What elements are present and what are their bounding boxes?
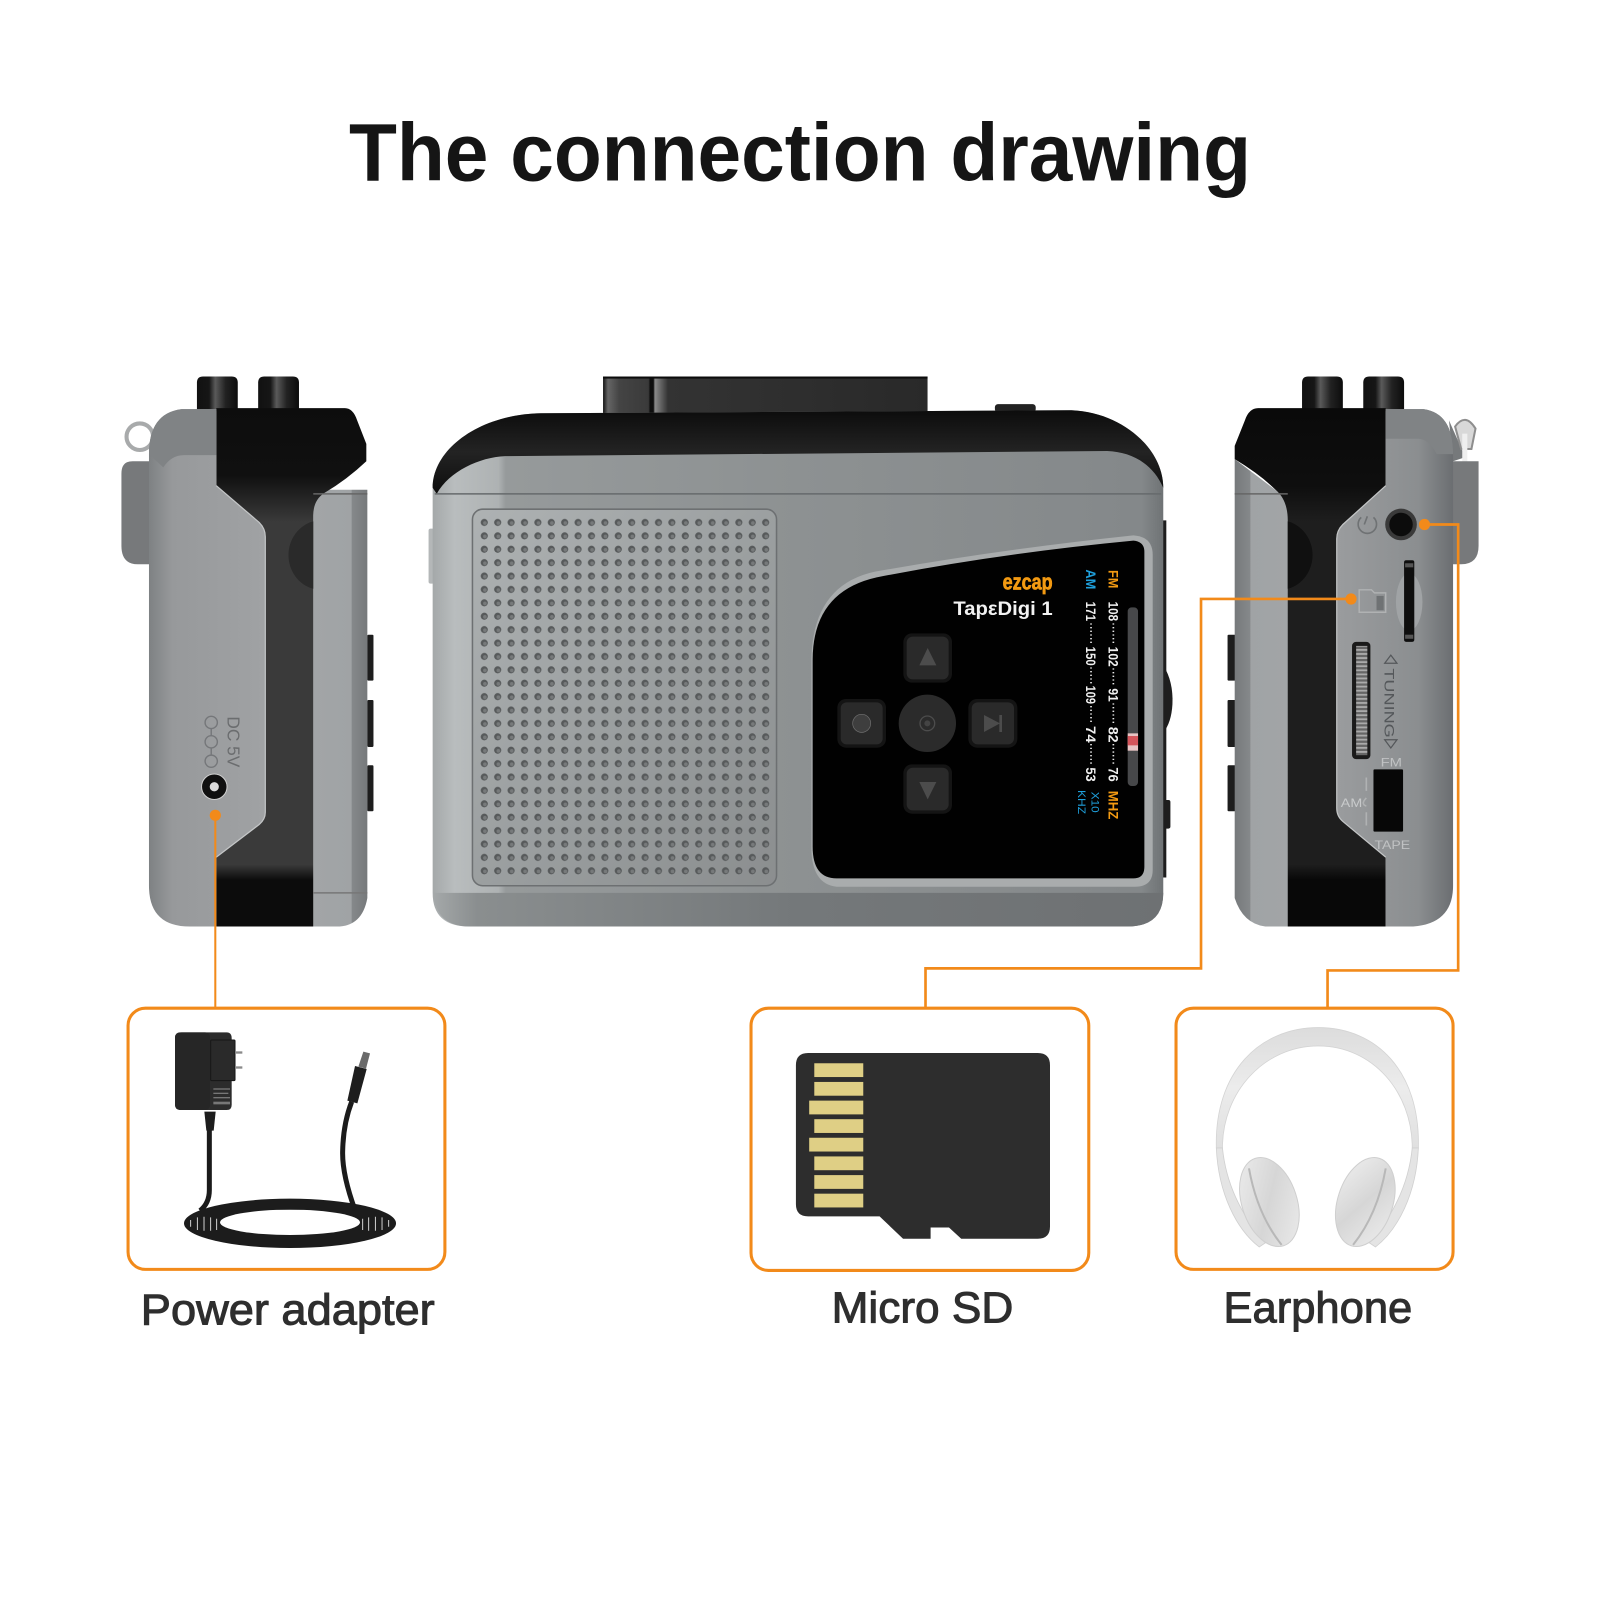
FM scale: 102 — [1105, 647, 1121, 667]
AM scale — [1075, 569, 1100, 815]
AM label: AM — [1341, 796, 1362, 810]
FM scale — [1105, 570, 1121, 820]
icon: headphones — [1216, 1028, 1418, 1254]
knobs — [197, 377, 299, 411]
icon: micro SD card — [796, 1053, 1050, 1239]
DC jack — [202, 774, 227, 799]
side wheel and buttons — [1161, 520, 1173, 878]
label: Power adapter: Power adapter — [141, 1285, 435, 1334]
TAPE label: TAPE — [1374, 838, 1410, 852]
round notch — [288, 521, 313, 589]
AM scale: 74 — [1083, 726, 1099, 743]
stems — [1216, 1148, 1265, 1247]
micro SD slot — [1396, 560, 1422, 642]
skip button — [968, 699, 1017, 748]
knobs — [1302, 377, 1404, 411]
icon: power adapter — [175, 1032, 396, 1248]
band switch — [1373, 769, 1403, 832]
up button — [903, 633, 952, 683]
black panel face — [813, 541, 1144, 878]
tuning label: TUNING — [1381, 668, 1397, 738]
back section — [313, 490, 367, 927]
earphone symbol — [1358, 516, 1377, 533]
AM scale: 53 — [1083, 767, 1099, 782]
control panel — [811, 535, 1153, 887]
left side view of device — [121, 377, 373, 927]
connector: earphone — [1328, 519, 1458, 1008]
switch marks — [1363, 778, 1366, 826]
gray front panel — [1337, 409, 1453, 927]
FM scale: 108 — [1105, 602, 1121, 621]
label: Earphone: Earphone — [1223, 1283, 1412, 1332]
polarity symbol — [205, 716, 217, 767]
earphone jack — [1385, 509, 1417, 540]
AM scale: 109 — [1083, 686, 1099, 704]
side buttons — [1228, 635, 1236, 811]
box — [1176, 1008, 1453, 1269]
record button — [837, 699, 886, 748]
front view of device — [429, 377, 1173, 927]
label: Micro SD: Micro SD — [832, 1283, 1013, 1332]
FM label: FM — [1381, 755, 1402, 769]
black middle section — [1235, 408, 1386, 927]
headband — [1216, 1028, 1418, 1148]
AM scale: KHZ — [1075, 790, 1087, 815]
connector: power — [210, 810, 221, 1008]
FM scale: FM — [1105, 570, 1121, 588]
round notch — [1288, 521, 1313, 589]
front panel top shade — [149, 409, 216, 467]
gray front panel — [149, 409, 265, 927]
panel: earphone — [1176, 1008, 1453, 1269]
antenna ring and clip — [121, 412, 182, 564]
front panel top shade — [1386, 409, 1453, 454]
cassette door top — [603, 377, 928, 413]
connector: micro SD — [926, 593, 1357, 1008]
FM scale: MHZ — [1105, 791, 1121, 820]
panel bezel — [811, 535, 1153, 887]
micro SD symbol — [1359, 590, 1386, 612]
center button — [899, 695, 956, 752]
tuning wheel — [1352, 642, 1370, 759]
panel: power adapter — [128, 1008, 445, 1269]
speaker grille — [472, 509, 777, 886]
down button — [903, 764, 952, 814]
tuning arrows — [1385, 655, 1397, 748]
FM scale: 82 — [1105, 727, 1121, 743]
DC 5V label: DC 5V — [224, 716, 244, 768]
brand: ezcap — [1003, 569, 1053, 594]
AM scale: 150 — [1083, 647, 1099, 666]
lower band — [434, 893, 1163, 927]
AM scale: 171 — [1083, 602, 1099, 621]
panel: micro SD — [751, 1008, 1089, 1270]
FM scale: 91 — [1105, 688, 1121, 702]
back section — [1235, 459, 1289, 927]
small side tab — [429, 529, 435, 584]
box — [751, 1008, 1089, 1270]
body — [433, 410, 1163, 927]
black top band — [433, 410, 1163, 494]
FM scale: 76 — [1105, 767, 1121, 782]
scale dots — [1091, 623, 1113, 766]
box — [128, 1008, 445, 1269]
right side view of device — [1228, 377, 1479, 927]
black middle section — [216, 408, 366, 927]
ear cups — [1229, 1150, 1310, 1254]
AM scale: AM — [1083, 569, 1099, 589]
antenna ring and clip — [1447, 420, 1479, 564]
title: The connection drawing — [349, 108, 1251, 199]
side buttons — [367, 635, 373, 811]
tuning slider — [1128, 607, 1138, 786]
AM scale: X10 — [1088, 792, 1100, 813]
model name: TapεDigi 1 — [953, 599, 1053, 620]
